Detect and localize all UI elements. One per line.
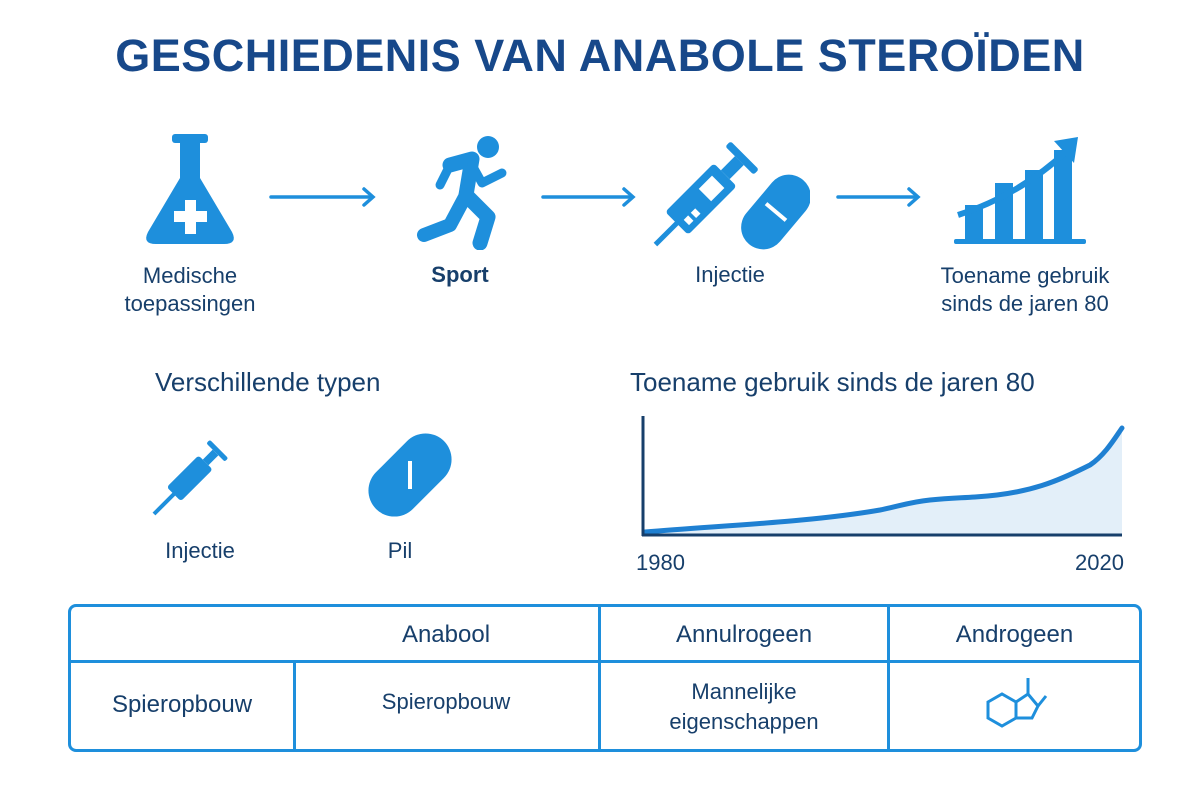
- label: toename: sinds de jaren 80: [941, 291, 1109, 316]
- icon: syringe and pill: [654, 142, 810, 250]
- icon: flask: [146, 134, 234, 244]
- cell: mannelijke: Mannelijke: [691, 679, 797, 704]
- cell: spieropbouw: Spieropbouw: [382, 689, 510, 714]
- arrow 2: [541, 187, 636, 207]
- cell: mannelijke: [669, 679, 819, 734]
- heading: verschillende typen: Verschillende typen: [155, 367, 380, 397]
- label: toename: Toename gebruik: [941, 263, 1109, 288]
- label: medische: Medische toepassingen: [125, 263, 255, 316]
- axis label 1980: 1980: [636, 550, 685, 575]
- header: anabool: Anabool: [402, 621, 490, 648]
- label: sport: Sport: [431, 262, 489, 287]
- icon: runner: [416, 136, 506, 250]
- cell: mannelijke: eigenschappen: [669, 709, 819, 734]
- icon: molecule: [986, 678, 1048, 728]
- arrow 3: [836, 187, 920, 207]
- header: androgeen: Androgeen: [956, 621, 1073, 648]
- axis label 2020: 2020: [1075, 550, 1124, 575]
- title: GESCHIEDENIS VAN ANABOLE STEROÏDEN: [115, 30, 1085, 81]
- cell: spieropbouw logo: Spieropbouw: [112, 691, 252, 718]
- line chart: [642, 416, 1124, 536]
- label: pil: Pil: [388, 538, 412, 563]
- icon: growth chart: [954, 137, 1086, 244]
- label: toename: [941, 263, 1110, 316]
- label: injectie: Injectie: [695, 262, 765, 287]
- icon: pill: [368, 434, 452, 516]
- table: [68, 604, 1142, 752]
- arrow 1: [269, 187, 376, 207]
- heading: chart: Toename gebruik sinds de jaren 80: [630, 367, 1035, 397]
- icon: syringe: [152, 440, 228, 516]
- label: injectie: Injectie: [165, 538, 235, 563]
- header: annulrogeen: Annulrogeen: [676, 621, 812, 648]
